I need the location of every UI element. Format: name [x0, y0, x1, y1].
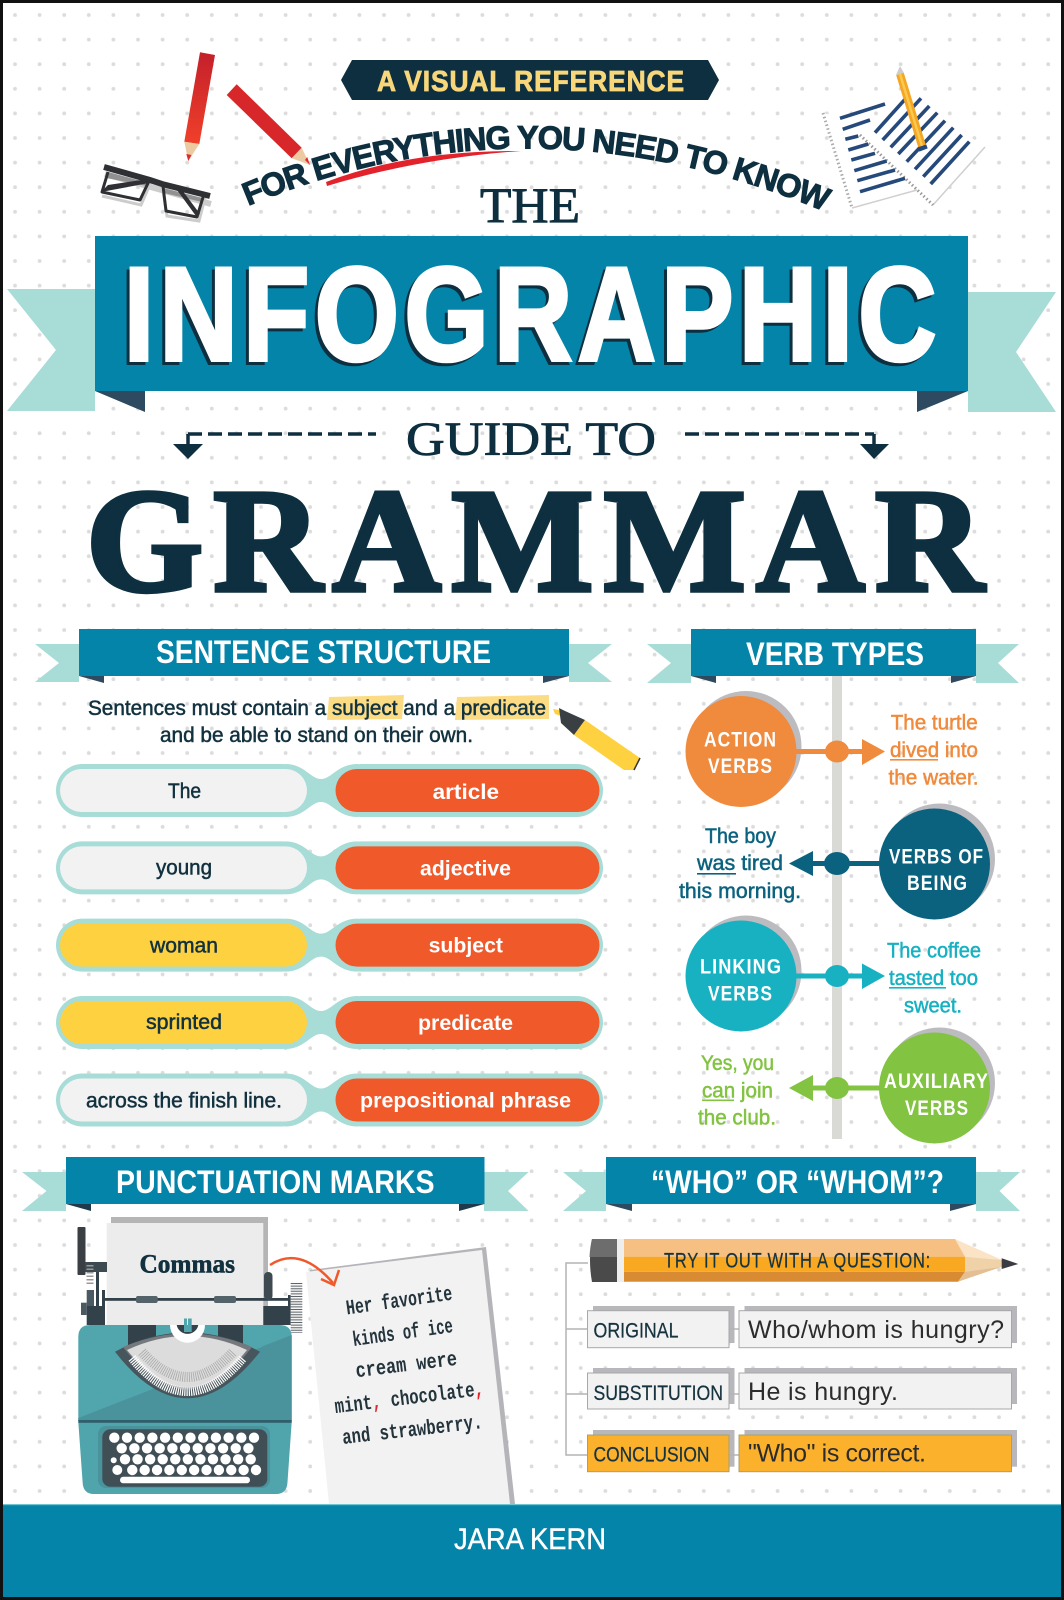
row: woman / subject: subject	[429, 935, 503, 958]
row: young / adjective	[56, 841, 603, 894]
verb: linking verbs: tasted too	[889, 967, 978, 990]
verb: linking verbs: VERBS	[708, 982, 773, 1006]
verb: verbs of being: was tired	[696, 852, 783, 875]
badge: a visual reference: A VISUAL REFERENCE	[377, 66, 685, 98]
icon: highlighter	[553, 708, 640, 770]
heading ribbon: punctuation marks: PUNCTUATION MARKS	[116, 1164, 435, 1200]
curved subtitle: FOR EVERYTHING YOU NEED TO KNOW	[241, 126, 834, 210]
title: the: THE	[480, 177, 580, 233]
row: original: ORIGINAL	[594, 1320, 678, 1343]
intro text with highlights: Sentences must contain a subject and a predicate	[88, 697, 546, 720]
heading ribbon: sentence structure: SENTENCE STRUCTURE	[156, 634, 491, 670]
row: sprinted / predicate: predicate	[418, 1012, 513, 1035]
row: conclusion: CONCLUSION	[594, 1444, 710, 1467]
footer band with author	[0, 1504, 1064, 1600]
heading ribbon: who or whom: “WHO” OR “WHOM”?	[651, 1164, 944, 1200]
verb: action verbs: The turtle	[891, 712, 978, 734]
heading ribbon: verb types	[647, 629, 1019, 683]
panel: who or whom	[563, 1157, 1020, 1472]
title: guide to with arrows: GUIDE TO	[406, 413, 656, 466]
note paper with example sentence: and strawberry.	[341, 1412, 484, 1451]
row: young / adjective: young	[156, 856, 212, 879]
verb: auxiliary verbs: Yes, you	[701, 1052, 774, 1075]
verb: auxiliary verbs: AUXILIARY	[884, 1070, 989, 1093]
verb: action verbs: VERBS	[708, 755, 773, 778]
row: the / article: article	[433, 781, 499, 804]
icon: pencil with prompt	[590, 1239, 1018, 1282]
note paper with example sentence: mint, chocolate,	[334, 1379, 485, 1420]
verb: action verbs: dived into	[890, 739, 978, 762]
row: conclusion: "Who" is correct.	[748, 1440, 926, 1468]
verb: verbs of being: BEING	[907, 872, 968, 895]
row: original: Who/whom is hungry?	[748, 1316, 1004, 1344]
verb: verbs of being: VERBS OF	[889, 846, 984, 868]
icon: red pencils	[184, 52, 310, 165]
row: conclusion	[588, 1430, 1017, 1472]
verb: linking verbs: The coffee	[887, 940, 981, 962]
verb: auxiliary verbs: VERBS	[905, 1097, 969, 1120]
timeline bar	[832, 676, 842, 1139]
verb: linking verbs: LINKING	[700, 956, 782, 979]
verb: verbs of being	[679, 804, 995, 920]
flow connector lines	[566, 1263, 588, 1455]
row: the / article: The	[168, 780, 201, 803]
heading ribbon: verb types: VERB TYPES	[746, 636, 924, 672]
row: across the finish line / prepositional phrase: prepositional phrase	[360, 1090, 571, 1112]
verb: verbs of being: The boy	[705, 825, 776, 848]
row: woman / subject: woman	[149, 935, 218, 958]
footer band with author: JARA KERN	[454, 1523, 606, 1556]
icon: pencil with prompt: TRY IT OUT WITH A QUESTION:	[664, 1250, 931, 1273]
heading ribbon: sentence structure	[35, 629, 612, 683]
intro text with highlights: and be able to stand on their own.	[160, 724, 473, 747]
row: woman / subject	[56, 919, 603, 972]
panel: sentence structure	[35, 629, 640, 1126]
row: the / article	[56, 764, 603, 817]
row: sprinted / predicate: sprinted	[146, 1011, 222, 1034]
illustration: typewriter	[78, 1217, 302, 1494]
illustration: typewriter: Commas	[140, 1250, 235, 1279]
verb: verbs of being: this morning.	[679, 880, 801, 903]
row: sprinted / predicate	[56, 996, 603, 1049]
row: substitution: SUBSTITUTION	[594, 1382, 723, 1405]
row: substitution: He is hungry.	[748, 1378, 898, 1406]
verb: linking verbs: sweet.	[904, 994, 962, 1018]
verb: auxiliary verbs	[698, 1028, 995, 1144]
arrow: commas to note	[270, 1258, 339, 1285]
row: across the finish line / prepositional phrase: across the finish line.	[86, 1090, 282, 1112]
row: original	[588, 1306, 1017, 1348]
verb: auxiliary verbs: can join	[702, 1080, 773, 1103]
verb: action verbs: the water.	[888, 767, 978, 790]
heading ribbon: punctuation marks	[22, 1157, 529, 1211]
icon: papers with pencil	[823, 66, 985, 208]
verb: action verbs: ACTION	[704, 729, 777, 752]
intro text with highlights	[88, 695, 549, 747]
note paper with example sentence: kinds of ice	[351, 1316, 455, 1353]
verb: auxiliary verbs: the club.	[698, 1106, 776, 1130]
title: grammar: GRAMMAR	[86, 460, 994, 624]
note paper with example sentence	[306, 1247, 515, 1504]
note paper with example sentence: Her favorite	[345, 1284, 454, 1321]
panel: verb types	[647, 629, 1019, 1144]
row: across the finish line / prepositional phrase	[56, 1074, 603, 1126]
row: young / adjective: adjective	[420, 857, 511, 880]
row: substitution	[588, 1368, 1017, 1409]
title: guide to with arrows	[173, 413, 889, 466]
icon: glasses	[101, 167, 211, 221]
verb: linking verbs	[686, 916, 981, 1032]
note paper with example sentence: cream were	[354, 1349, 458, 1384]
heading ribbon: who or whom	[563, 1157, 1020, 1211]
panel: punctuation marks	[22, 1157, 529, 1504]
verb: action verbs	[686, 691, 978, 807]
